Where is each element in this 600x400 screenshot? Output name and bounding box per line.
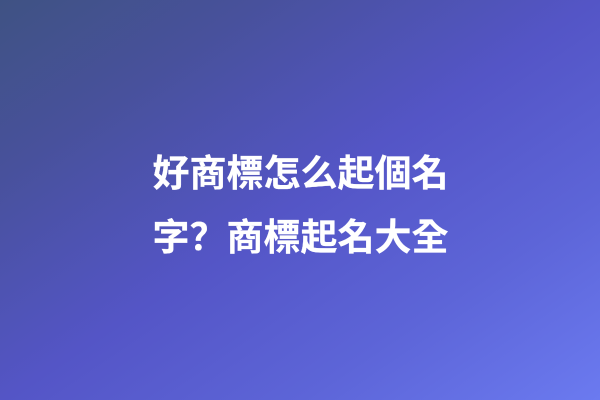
title: 好商標怎么起個名 [152,153,448,194]
title: 字？商標起名大全 [152,207,448,261]
title [152,153,448,261]
